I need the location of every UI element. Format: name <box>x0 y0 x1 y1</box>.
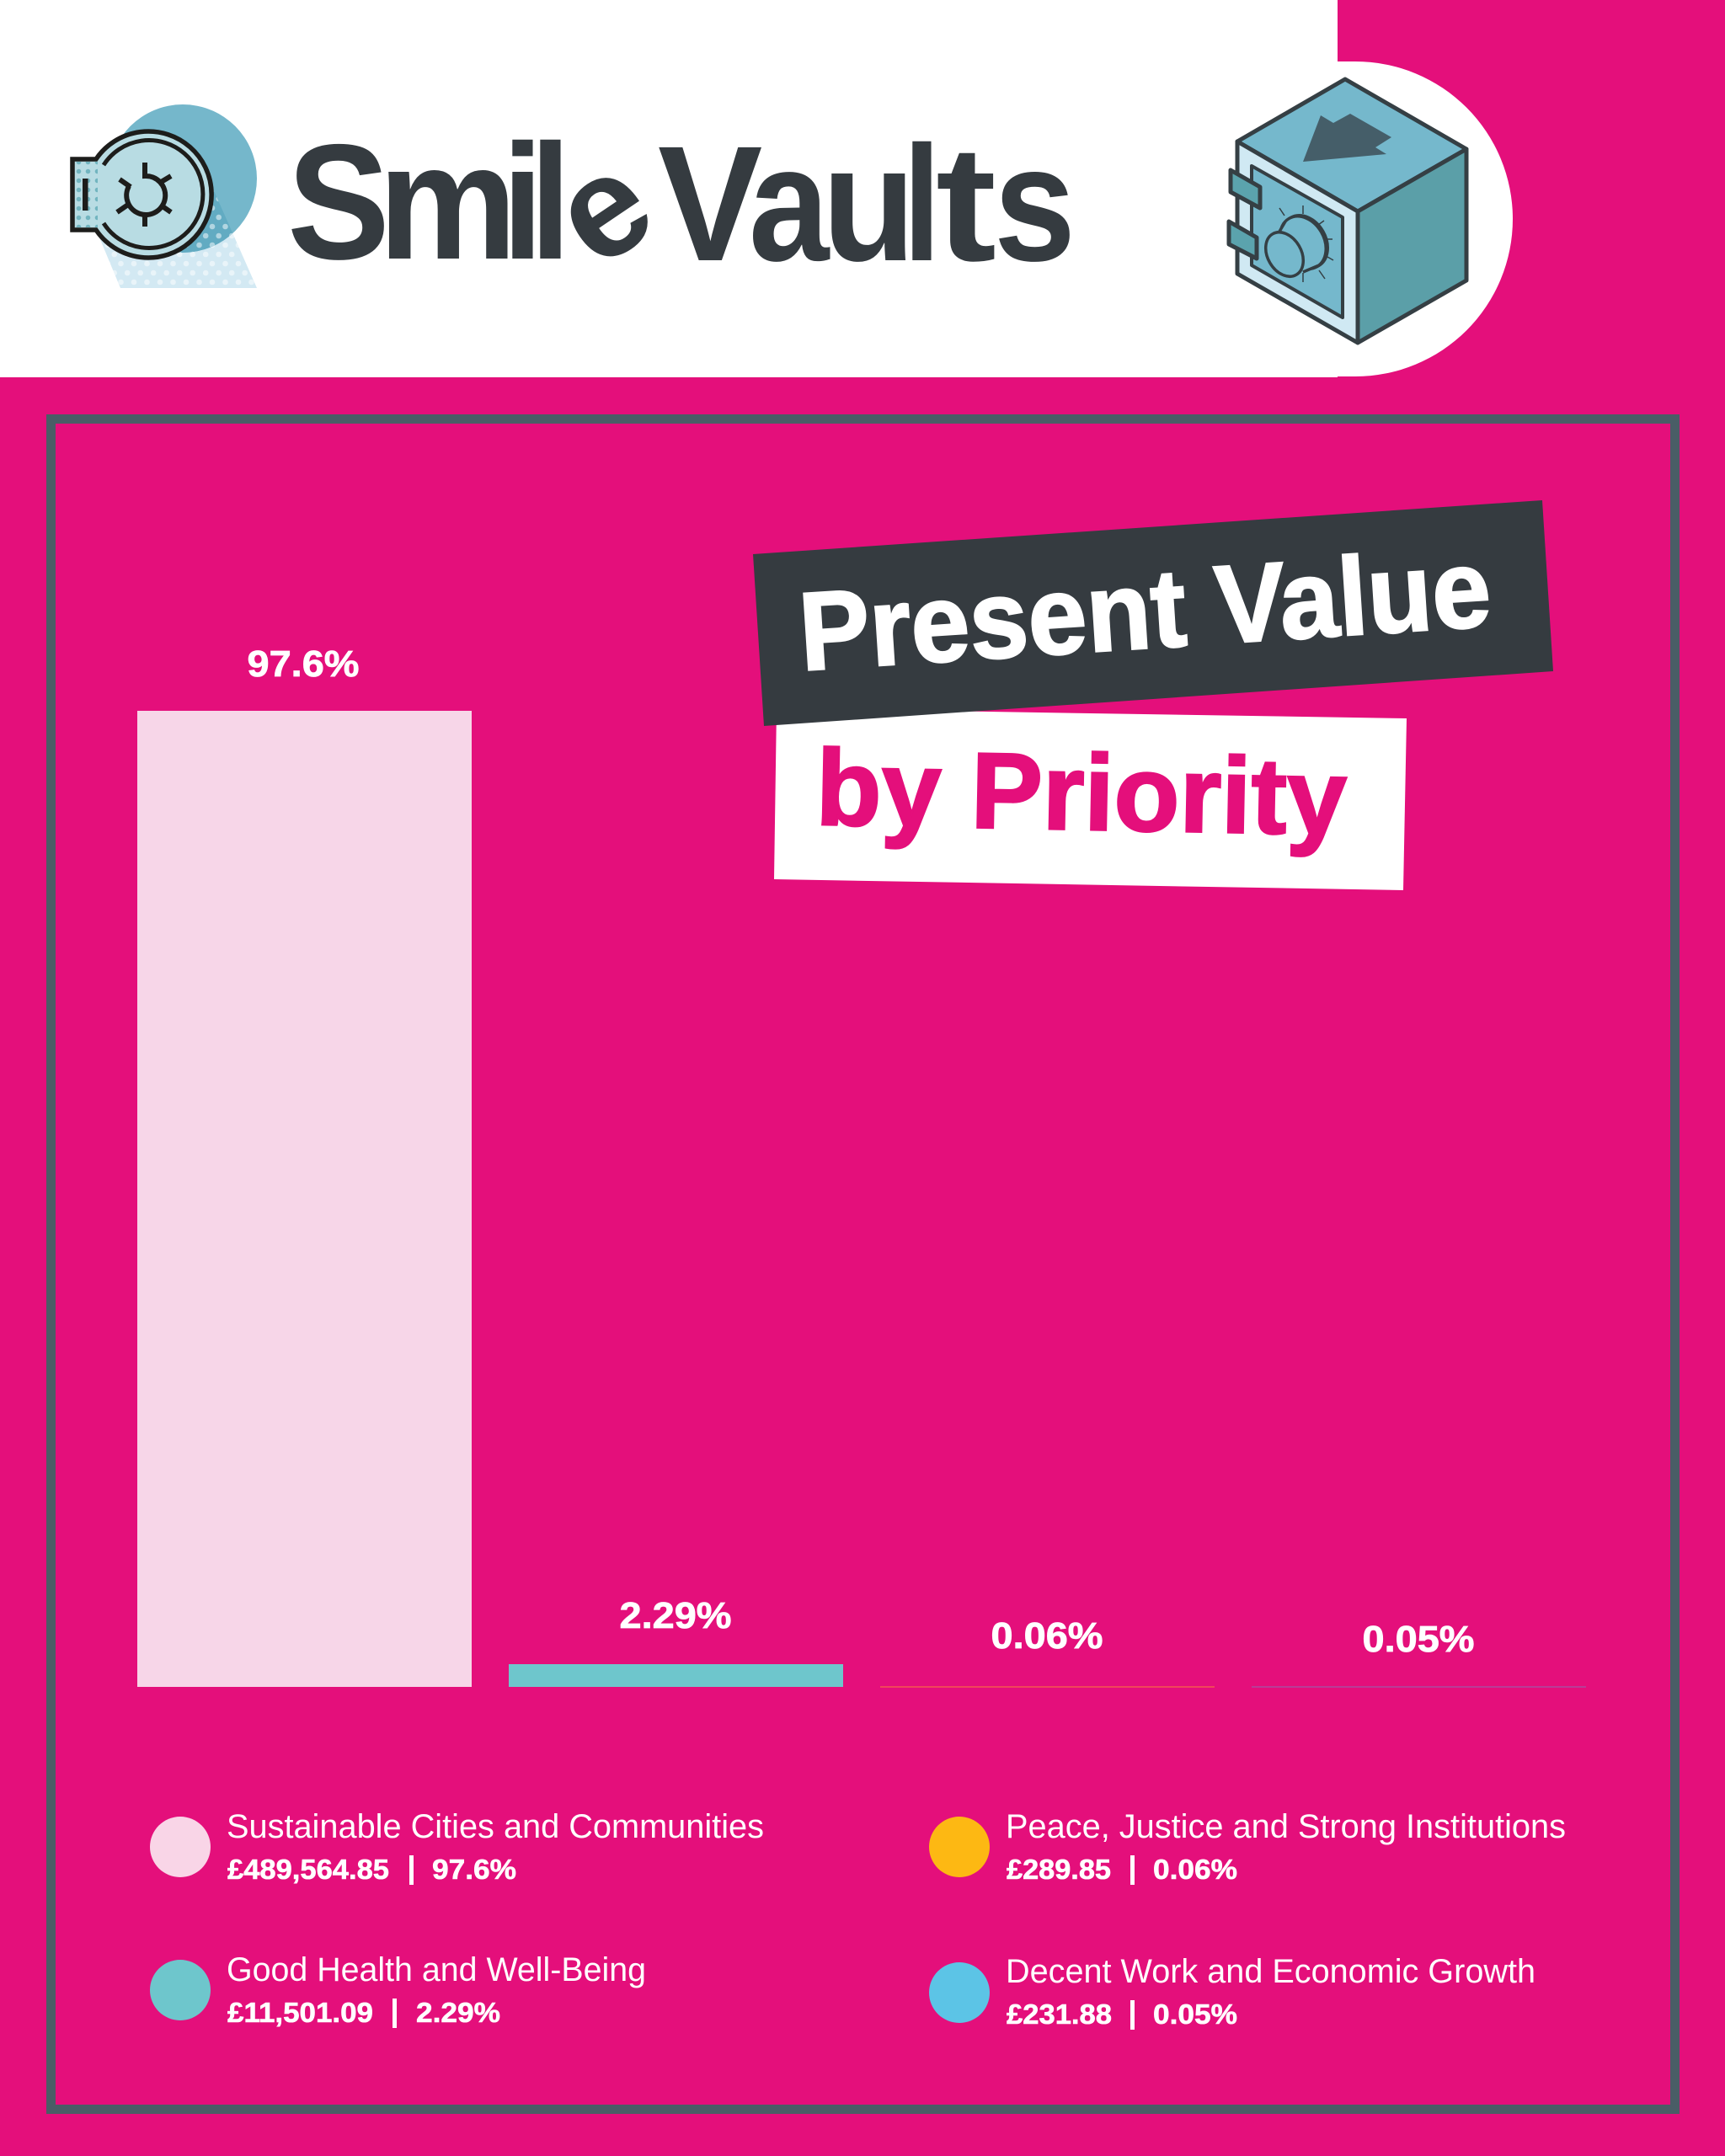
legend item: Decent Work and Economic Growth: £231.88 <box>1007 1999 1112 2030</box>
logo wordmark: l <box>903 112 941 296</box>
legend item: Good Health and Well-Being <box>150 1951 646 2028</box>
logo wordmark: t <box>936 112 996 296</box>
logo wordmark: u <box>822 112 916 296</box>
header band <box>0 0 1513 377</box>
bar: Sustainable Cities and Communities <box>137 643 472 1687</box>
legend item: Good Health and Well-Being: Good Health and Well-Being <box>227 1951 646 1988</box>
icon: logo vault dial <box>72 104 257 288</box>
logo wordmark: e <box>524 120 680 296</box>
bar chart <box>137 643 1586 1688</box>
legend item: Sustainable Cities and Communities: Sustainable Cities and Communities <box>227 1808 764 1845</box>
logo wordmark: i <box>502 110 543 294</box>
bar: Good Health and Well-Being <box>509 1595 843 1687</box>
legend item: Sustainable Cities and Communities: 97.6% <box>432 1854 516 1885</box>
title: Present Value <box>753 500 1553 726</box>
logo wordmark <box>287 110 1076 296</box>
title: by Priority: by Priority <box>814 728 1348 858</box>
legend item: Decent Work and Economic Growth <box>929 1953 1535 2030</box>
legend item: Peace, Justice and Strong Institutions: £289.85 <box>1007 1854 1111 1885</box>
legend item: Good Health and Well-Being: 2.29% <box>416 1997 500 2028</box>
legend item: Good Health and Well-Being: £11,501.09 <box>227 1997 373 2028</box>
legend item: Peace, Justice and Strong Institutions: Peace, Justice and Strong Institutions <box>1006 1808 1566 1845</box>
icon: safe <box>1229 79 1466 343</box>
title: Present Value: Present Value <box>795 526 1494 694</box>
legend item: Peace, Justice and Strong Institutions <box>929 1808 1566 1885</box>
legend item: Decent Work and Economic Growth: Decent Work and Economic Growth <box>1006 1953 1535 1990</box>
panel frame <box>51 419 1674 2109</box>
legend item: Sustainable Cities and Communities: £489,564.85 <box>227 1854 389 1885</box>
legend item: Sustainable Cities and Communities <box>150 1808 764 1885</box>
logo wordmark: l <box>530 110 571 294</box>
logo wordmark: S <box>287 110 390 294</box>
logo wordmark: m <box>378 110 517 294</box>
logo wordmark: V <box>658 112 762 296</box>
legend <box>150 1808 1566 2030</box>
legend item: Peace, Justice and Strong Institutions: 0.06% <box>1153 1854 1237 1885</box>
logo wordmark: s <box>994 112 1076 296</box>
bar: Peace, Justice and Strong Institutions: 0.06% <box>991 1615 1103 1657</box>
bar: Decent Work and Economic Growth: 0.05% <box>1363 1619 1474 1660</box>
bar: Sustainable Cities and Communities: 97.6% <box>248 643 359 685</box>
logo wordmark: a <box>749 112 830 296</box>
bar: Good Health and Well-Being: 2.29% <box>620 1595 731 1636</box>
legend item: Decent Work and Economic Growth: 0.05% <box>1153 1999 1237 2030</box>
title: by Priority <box>774 708 1407 890</box>
